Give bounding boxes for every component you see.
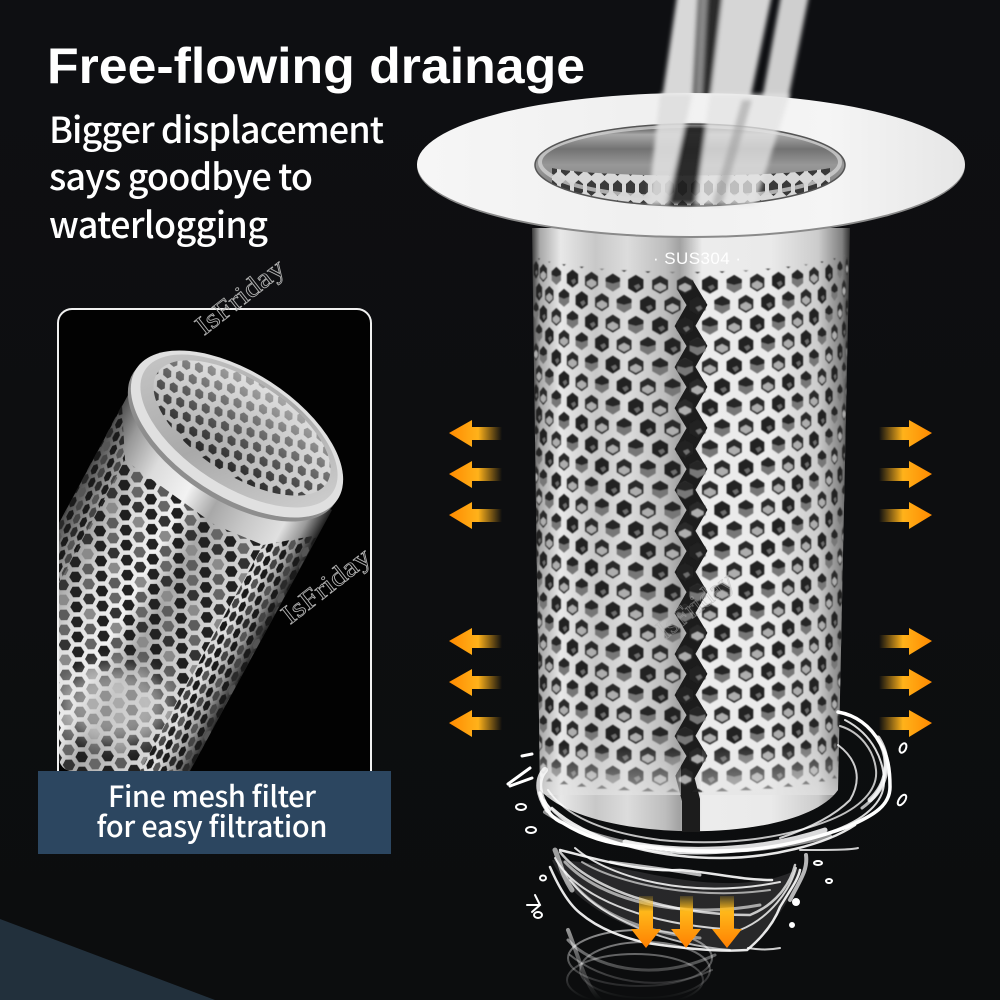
cap rim [128, 368, 335, 522]
engraved label SUS304: · SUS304 · [653, 249, 741, 268]
background corner wedge [0, 919, 215, 1000]
caption box: Fine mesh filter [108, 774, 316, 816]
tube perforations [59, 460, 260, 771]
caption box [38, 771, 391, 854]
inner basket holes [552, 168, 830, 206]
watermarks: IsFriday [275, 541, 377, 630]
tube perforations left edge [59, 406, 125, 582]
opening outline [535, 124, 845, 206]
watermarks [189, 252, 740, 645]
caption box: for easy filtration [96, 804, 328, 846]
flange opening [535, 124, 845, 206]
splash droplets [508, 742, 908, 927]
cap inner disc [140, 354, 338, 508]
panel: fine mesh close-up [50, 309, 371, 789]
subtitle: waterlogging [49, 197, 268, 249]
cap mesh [154, 360, 330, 496]
water stream above strainer [662, 0, 810, 100]
watermarks: IsFriday [650, 565, 740, 645]
title: Free-flowing drainage [47, 38, 585, 94]
arrows: flow down [631, 896, 742, 948]
subtitle: Bigger displacement [49, 102, 384, 154]
tube perforations right edge [140, 536, 316, 771]
watermarks: IsFriday [189, 252, 291, 341]
centre seam [685, 285, 697, 832]
arrows: flow out right [879, 420, 932, 737]
strainer flange [417, 93, 965, 238]
subtitle [49, 102, 384, 249]
close-up tube [59, 350, 344, 771]
upper ring [539, 712, 890, 858]
arrows: flow out left [449, 420, 502, 737]
lower bowl strokes [550, 848, 806, 951]
inner rim [540, 126, 840, 198]
bottom fade of perforations right [702, 748, 839, 795]
perforation columns [533, 253, 849, 792]
cap highlight [154, 360, 330, 496]
cap face [130, 350, 344, 518]
lower bowl fill [552, 860, 800, 950]
bottom fade of perforations [540, 748, 681, 795]
water stream over opening [648, 94, 790, 205]
lighter lower holes [60, 667, 170, 743]
strainer: main cylinder [532, 228, 850, 832]
inner basket hole pattern [552, 168, 830, 206]
water swirl [508, 712, 908, 1000]
cylinder body [532, 228, 850, 831]
subtitle: says goodbye to [49, 149, 313, 201]
fading vortex [567, 930, 715, 1000]
